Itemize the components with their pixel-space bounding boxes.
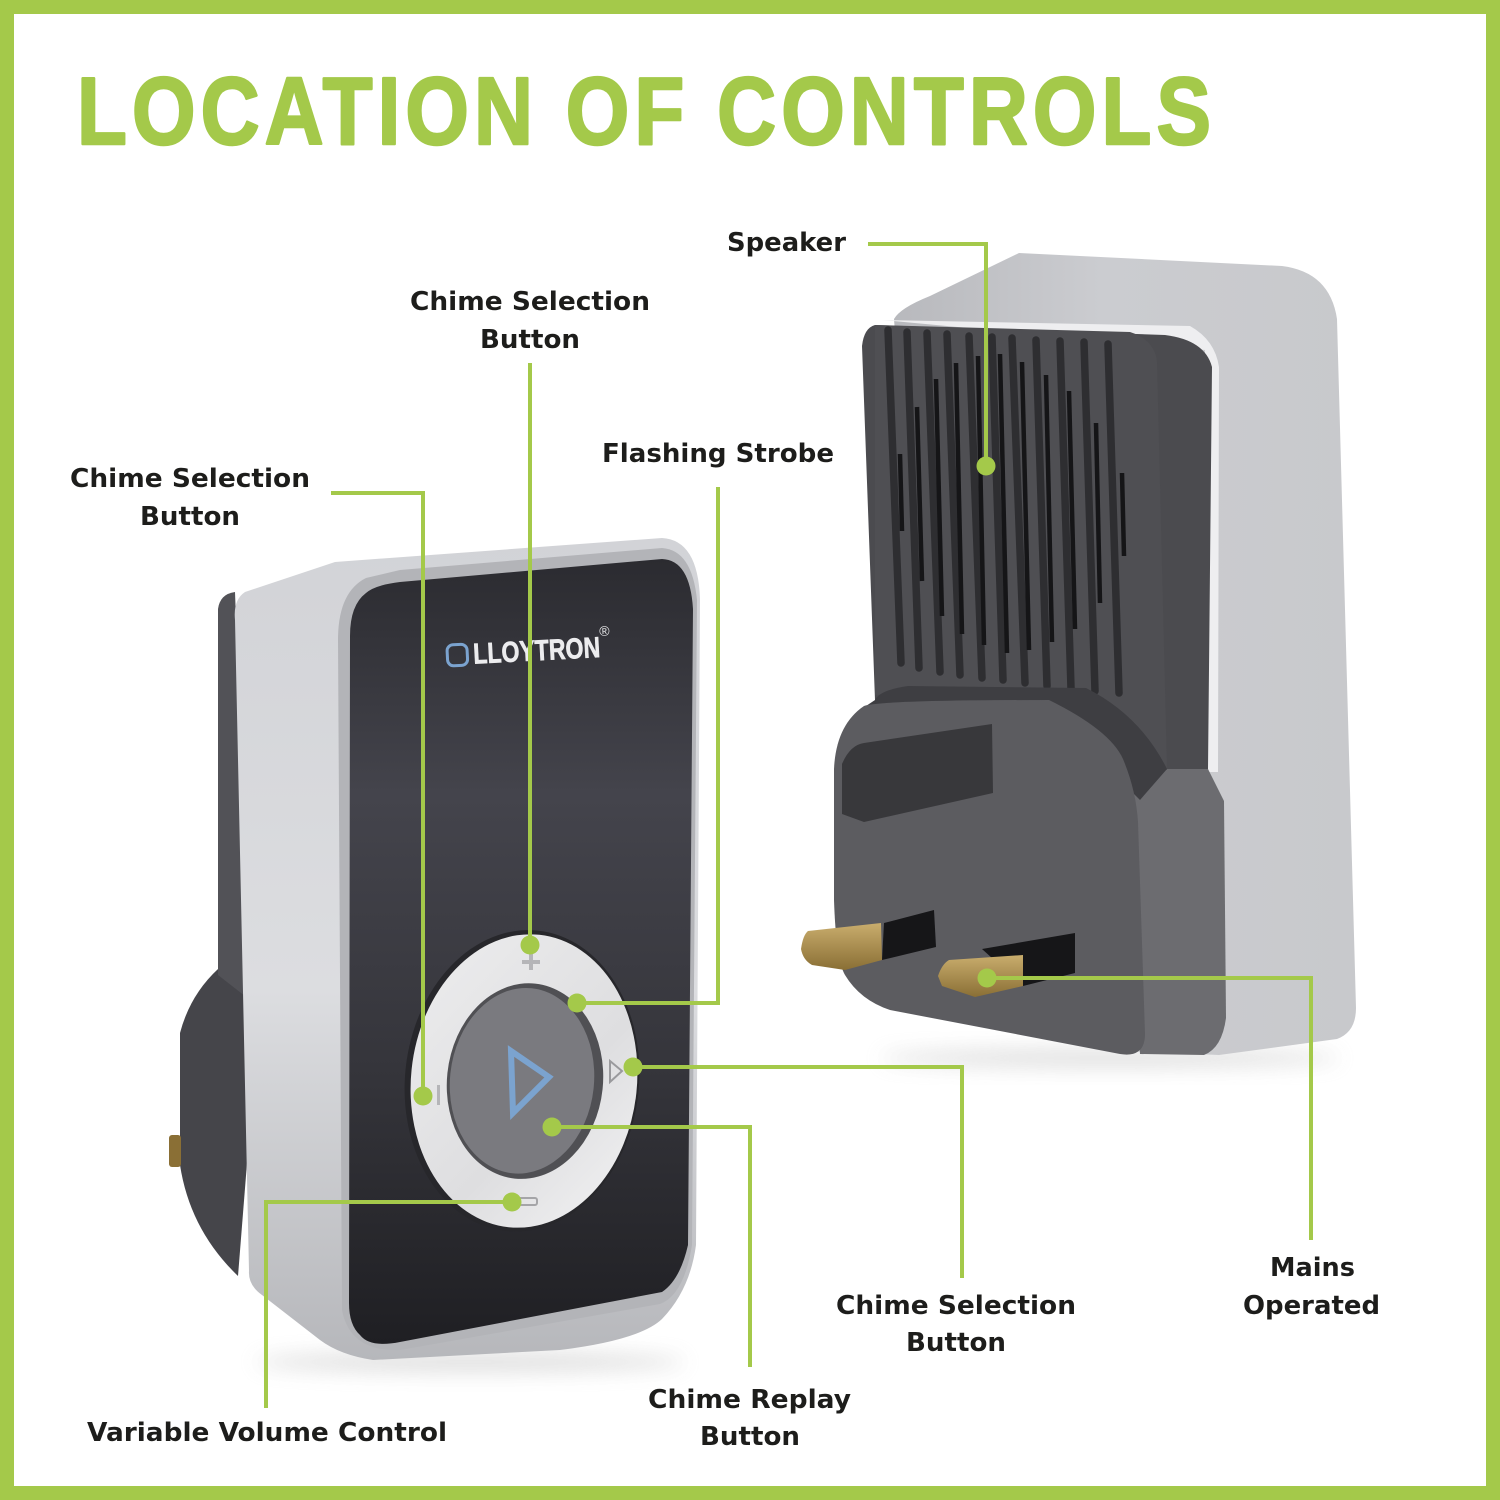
volume leader <box>266 1192 522 1408</box>
play triangle <box>511 1051 549 1113</box>
label: top chime selection button: Chime Selection <box>410 287 650 317</box>
label: chime replay button: Button <box>700 1422 800 1452</box>
label: chime replay button <box>648 1385 851 1452</box>
logo wordmark: LLOYTRON <box>472 632 601 671</box>
plug behind the front unit <box>180 969 260 1276</box>
label: top chime selection button <box>410 287 650 355</box>
inner panel <box>875 325 1167 770</box>
registered mark: ® <box>599 623 611 639</box>
label: speaker: Speaker <box>727 228 846 258</box>
title: LOCATION OF CONTROLS <box>77 58 1216 165</box>
label: right chime selection button: Chime Selection <box>836 1291 1076 1321</box>
label: right chime selection button: Button <box>906 1328 1006 1358</box>
label: left chime selection button: Button <box>140 502 240 532</box>
callout lines and dots <box>266 244 1311 1408</box>
previous symbol <box>437 1085 440 1105</box>
label: mains operated: Mains <box>1270 1253 1355 1283</box>
minus symbol <box>518 1198 537 1205</box>
lower dark body <box>1120 700 1226 1055</box>
right chime selection leader <box>624 1058 962 1278</box>
label: chime replay button: Chime Replay <box>648 1385 851 1415</box>
brand logo <box>446 623 612 672</box>
earth pin <box>842 724 993 822</box>
speaker slits <box>900 354 1124 653</box>
left chime selection leader <box>331 493 432 1106</box>
label: flashing strobe: Flashing Strobe <box>602 439 834 469</box>
replay button <box>441 981 603 1181</box>
product: rear of door chime <box>801 253 1356 1067</box>
neutral pin sleeve <box>982 933 1075 986</box>
silver housing <box>894 253 1356 1055</box>
speaker leader <box>868 244 996 476</box>
live pin sleeve <box>882 910 936 960</box>
plug body <box>834 700 1145 1055</box>
label: left chime selection button <box>70 464 310 532</box>
plug pin stub <box>169 1135 181 1167</box>
silver ring <box>396 923 652 1239</box>
product: front of door chime <box>169 538 700 1372</box>
top chime selection leader <box>520 363 540 954</box>
button rim <box>437 975 613 1187</box>
live pin tip <box>801 923 882 970</box>
label: variable volume control: Variable Volume Control <box>87 1418 447 1448</box>
housing bevel <box>338 548 697 1350</box>
black front panel <box>349 559 693 1344</box>
logo icon <box>447 644 468 666</box>
label: right chime selection button <box>836 1291 1076 1358</box>
silver housing <box>235 538 700 1360</box>
speaker grooves <box>888 330 1119 693</box>
speaker face <box>862 325 1212 769</box>
label: mains operated <box>1243 1253 1380 1321</box>
next symbol <box>610 1061 622 1082</box>
plus symbol <box>522 954 540 970</box>
label: mains operated: Operated <box>1243 1291 1380 1321</box>
light edge trim <box>882 320 1219 772</box>
mains leader <box>978 968 1311 1240</box>
label: top chime selection button: Button <box>480 325 580 355</box>
label: left chime selection button: Chime Selection <box>70 464 310 494</box>
ring shadow <box>390 918 654 1243</box>
curved band above plug <box>860 686 1167 800</box>
rear strip <box>218 592 250 1000</box>
chime replay leader <box>542 1118 750 1367</box>
flashing strobe leader <box>568 487 718 1012</box>
control ring <box>390 918 654 1243</box>
neutral pin tip <box>938 955 1023 997</box>
